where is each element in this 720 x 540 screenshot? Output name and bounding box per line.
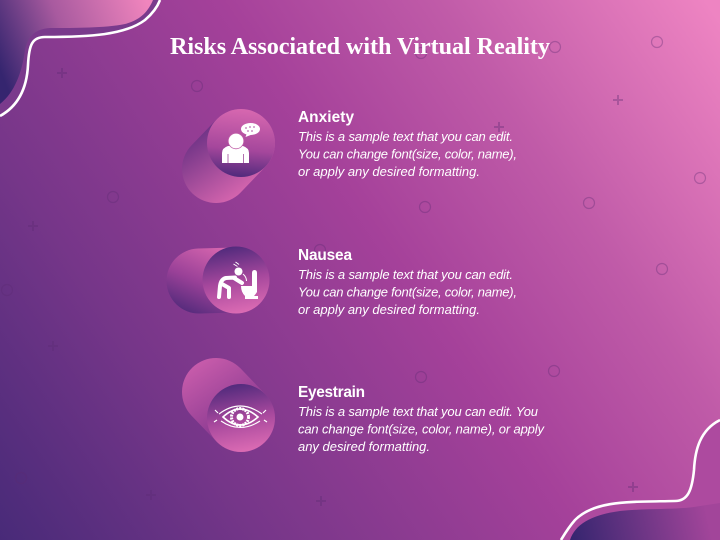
anxiety disc	[207, 109, 275, 177]
eyestrain heading: Eyestrain	[298, 384, 365, 401]
item: nausea	[199, 246, 517, 317]
bottom-right wave decoration	[561, 420, 720, 540]
eyestrain disc	[207, 384, 275, 452]
nausea body text: or apply any desired formatting.	[298, 302, 480, 317]
nausea cylinder	[199, 280, 236, 281]
anxiety body text: This is a sample text that you can edit.	[298, 129, 513, 144]
item: anxiety	[207, 109, 517, 179]
anxiety heading: Anxiety	[298, 109, 354, 126]
nausea body text: This is a sample text that you can edit.	[298, 267, 513, 282]
nausea body text	[298, 267, 517, 317]
top-left wave decoration	[0, 0, 160, 116]
eyestrain cylinder	[216, 392, 241, 418]
anxiety body text: You can change font(size, color, name),	[298, 146, 517, 162]
icon: person vomiting into toilet	[219, 262, 258, 299]
anxiety body text	[298, 129, 517, 179]
anxiety body text: or apply any desired formatting.	[298, 164, 480, 179]
eyestrain body text: This is a sample text that you can edit. You	[298, 404, 538, 419]
anxiety cylinder	[216, 143, 241, 169]
icon: person with thought bubble	[222, 123, 260, 163]
title: Risks Associated with Virtual Reality	[170, 33, 550, 60]
item: eyestrain	[207, 384, 546, 454]
eyestrain body text: any desired formatting.	[298, 439, 430, 454]
eyestrain body text: can change font(size, color, name), or apply	[298, 422, 546, 436]
eyestrain body text	[298, 404, 546, 454]
nausea disc	[202, 246, 270, 314]
nausea heading: Nausea	[298, 247, 352, 264]
icon: strained eye	[214, 406, 267, 428]
nausea body text: You can change font(size, color, name),	[298, 284, 517, 300]
